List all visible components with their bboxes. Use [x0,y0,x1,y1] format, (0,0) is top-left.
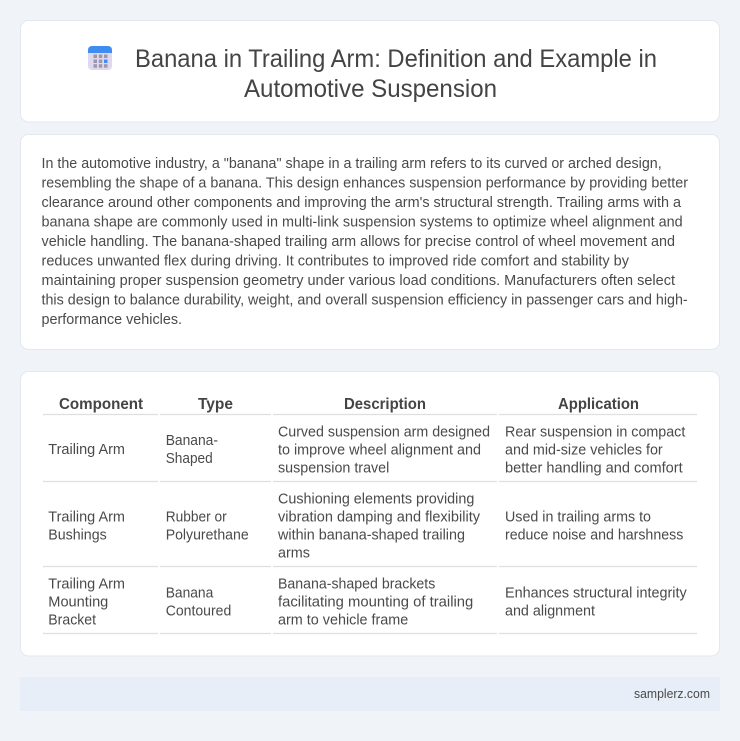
text block: definition paragraph: vehicle handling. The banana-shaped trailing arm allows for precise control of wheel movement and [42,233,675,250]
table row: trailing arm bushings: reduce noise and harshness [505,526,683,544]
table row: trailing arm mounting bracket [43,576,697,634]
table row: trailing arm: suspension travel [278,460,389,476]
table row: trailing arm bushings [43,490,697,566]
table row: trailing arm mounting bracket: Bracket [48,612,97,628]
table header row: Component [59,396,144,413]
panel: component table [20,372,720,656]
text block: definition paragraph: this design to balance durability, weight, and overall suspension efficiency in passenger cars and high- [42,292,688,308]
footer bar: samplerz.com [634,686,710,701]
table row: trailing arm mounting bracket: and alignment [505,602,596,620]
table header row: Description [344,396,426,413]
table row: trailing arm [43,424,697,482]
table row: trailing arm mounting bracket: Mounting [48,594,108,610]
panel: definition text [20,134,720,350]
table row: trailing arm: Shaped [166,450,213,467]
table row: trailing arm mounting bracket: Contoured [166,602,231,620]
table row: trailing arm bushings: Bushings [48,526,107,544]
footer bar [20,677,720,711]
table header row: Type [198,396,233,413]
title: Automotive Suspension [244,75,497,103]
table row: trailing arm: and mid-size vehicles for [505,442,663,458]
table row: trailing arm mounting bracket: Banana [166,584,214,602]
table row: trailing arm mounting bracket: Banana-shaped brackets [278,576,435,592]
table row: trailing arm bushings: Trailing Arm [48,508,125,526]
text block: definition paragraph: maintaining proper suspension geometry under various load conditions. Manufacturers often select [42,272,676,289]
text block: definition paragraph: resembling the shape of a banana. This design enhances suspension performance by providing better [42,174,688,192]
panel: title header [20,20,720,122]
table row: trailing arm bushings: Cushioning elements providing [278,490,474,508]
text block: definition paragraph: clearance around other components and improving the arm's structural strength. Trailing arms with a [42,194,682,211]
table row: trailing arm bushings: within banana-shaped trailing [277,526,465,544]
table row: trailing arm bushings: Used in trailing arms to [505,508,651,526]
text block: definition paragraph [42,155,688,328]
table row: trailing arm: Rear suspension in compact [505,424,686,440]
text block: definition paragraph: In the automotive industry, a "banana" shape in a trailing arm refers to its curved or arched design, [42,155,662,172]
title [135,45,657,103]
text block: definition paragraph: banana shape are commonly used in multi-link suspension systems to optimize wheel alignment and [42,214,683,230]
table row: trailing arm bushings: Rubber or [166,508,227,526]
title: Banana in Trailing Arm: Definition and Example in [135,45,657,73]
table header row: Application [558,396,639,413]
table row: trailing arm: better handling and comfort [505,460,684,476]
table row: trailing arm mounting bracket: arm to vehicle frame [278,612,408,628]
table row: trailing arm mounting bracket: Trailing Arm [48,576,125,592]
table row: trailing arm mounting bracket: Enhances structural integrity [505,584,687,602]
table row: trailing arm bushings: Polyurethane [166,526,249,544]
text block: definition paragraph: reduces unwanted flex during driving. It contributes to improved ride comfort and stability by [42,252,629,270]
table row: trailing arm mounting bracket: facilitating mounting of trailing [278,594,473,610]
table row: trailing arm: Banana- [166,432,218,449]
table header row [43,396,697,414]
icon: calendar [88,46,112,70]
table row: trailing arm bushings: vibration damping and flexibility [278,508,480,526]
table row: trailing arm: Trailing Arm [48,441,125,458]
table row: trailing arm: to improve wheel alignment and [278,442,481,458]
table row: trailing arm: Curved suspension arm designed [278,424,490,440]
text block: definition paragraph: performance vehicles. [42,311,182,328]
table row: trailing arm bushings: arms [278,544,310,562]
